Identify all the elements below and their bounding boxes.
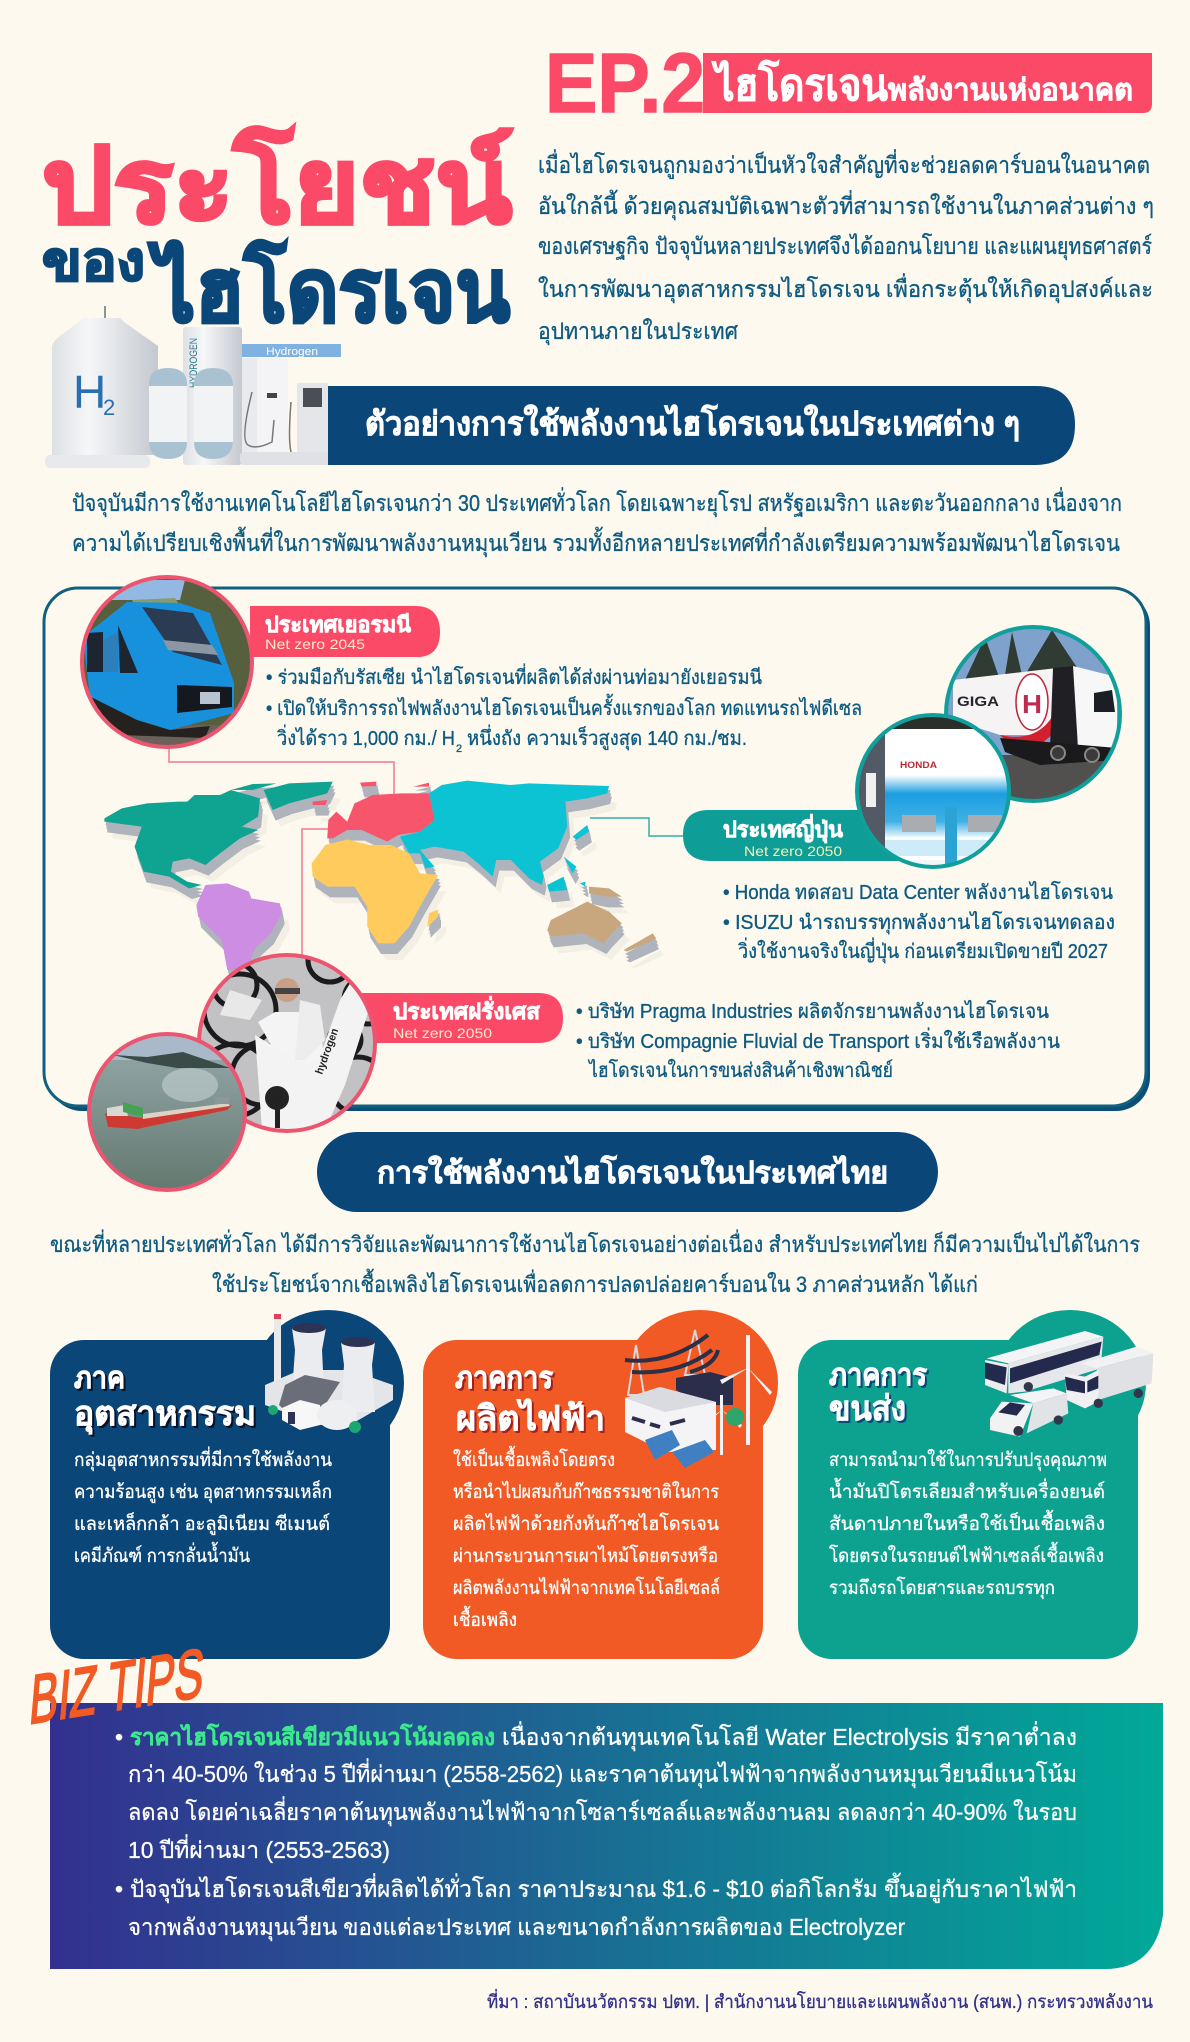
panel: transport: น้ำมันปิโตรเลียมสำหรับเครื่องยนต์ bbox=[829, 1478, 1105, 1503]
panel: industry: ภาค bbox=[74, 1362, 125, 1395]
heading: examples abroad: ตัวอย่างการใช้พลังงานไฮโดรเจนในประเทศต่าง ๆ bbox=[365, 404, 1020, 442]
text: tips body: ปัจจุบันไฮโดรเจนสีเขียวที่ผลิตได้ทั่วโลก ราคาประมาณ $1.6 - $10 ต่อกิโลกรัม ขึ้นอยู่กับราคาไฟฟ้า bbox=[130, 1873, 1077, 1903]
heading: thailand: การใช้พลังงานไฮโดรเจนในประเทศไทย bbox=[377, 1154, 888, 1190]
label: germany: ประเทศเยอรมนี bbox=[265, 612, 411, 637]
panel: industry: อุตสาหกรรม bbox=[74, 1395, 256, 1435]
label: germany bbox=[250, 606, 440, 657]
panel: power generation: ผ่านกระบวนการเผาไหม้โดยตรงหรือ bbox=[453, 1544, 718, 1567]
panel: power generation: ผลิตไฟฟ้า bbox=[456, 1398, 605, 1438]
text block: germany: • เปิดให้บริการรถไฟพลังงานไฮโดรเจนเป็นครั้งแรกของโลก ทดแทนรถไฟดีเซล bbox=[266, 694, 862, 720]
text: tips body: จากพลังงานหมุนเวียน ของแต่ละประเทศ และขนาดกำลังการผลิตของ Electrolyzer bbox=[128, 1914, 905, 1941]
episode banner: EP.2 bbox=[545, 36, 705, 130]
label: japan: ประเทศญี่ปุ่น bbox=[723, 813, 843, 844]
panel: power generation: ใช้เป็นเชื้อเพลิงโดยตรง bbox=[453, 1446, 615, 1471]
icon: hydrogen tanks and station: Hydrogen bbox=[266, 346, 318, 358]
japan: honda photo bbox=[855, 713, 1015, 873]
icon: hydrogen tanks and station bbox=[45, 306, 343, 468]
icon: bus truck van bbox=[985, 1331, 1153, 1437]
text block: germany: 2 bbox=[456, 743, 462, 755]
label: japan: Net zero 2050 bbox=[744, 843, 842, 859]
panel: transport bbox=[798, 1310, 1153, 1659]
label: france bbox=[360, 993, 563, 1043]
france: bicycle photo bbox=[197, 953, 377, 1133]
panel: transport: สามารถนำมาใช้ในการปรับปรุงคุณภาพ bbox=[829, 1449, 1107, 1472]
text: tips body: กว่า 40-50% ในช่วง 5 ปีที่ผ่านมา (2558-2562) และราคาต้นทุนไฟฟ้าจากพลังงานหมุนเวียนมีแนวโน้ม bbox=[128, 1758, 1077, 1788]
episode banner bbox=[545, 36, 1152, 130]
panel: transport: ภาคการ bbox=[829, 1359, 927, 1392]
title: ของ bbox=[42, 232, 145, 292]
intro paragraph bbox=[538, 149, 1154, 345]
panel: industry: และเหล็กกล้า อะลูมิเนียม ซีเมนต์ bbox=[74, 1511, 330, 1535]
heading: examples abroad bbox=[328, 386, 1075, 465]
panel: transport: ขนส่ง bbox=[829, 1390, 906, 1428]
biz tips badge: BIZ TIPS bbox=[27, 1633, 207, 1739]
japan: truck photo: GIGA bbox=[957, 693, 999, 709]
text block: japan: • Honda ทดสอบ Data Center พลังงานไฮโดรเจน bbox=[723, 881, 1113, 904]
text block: thailand overview bbox=[50, 1229, 1140, 1297]
germany: train photo bbox=[80, 575, 255, 750]
panel: power generation: หรือนำไปผสมกับก๊าซธรรมชาติในการ bbox=[453, 1481, 719, 1503]
text block: germany: วิ่งได้ราว 1,000 กม./ H bbox=[277, 724, 455, 750]
text: tips body: • bbox=[115, 1876, 123, 1902]
title: ไฮโดรเจน bbox=[148, 240, 510, 340]
panel: power generation: ผลิตไฟฟ้าด้วยกังหันก๊าซไฮโดรเจน bbox=[453, 1512, 719, 1535]
text block: japan: วิ่งใช้งานจริงในญี่ปุ่น ก่อนเตรียมเปิดขายปี 2027 bbox=[738, 937, 1108, 964]
intro paragraph: ในการพัฒนาอุตสาหกรรมไฮโดรเจน เพื่อกระตุ้นให้เกิดอุปสงค์และ bbox=[538, 273, 1153, 303]
text block: france: • บริษัท Compagnie Fluvial de Transport เริ่มใช้เรือพลังงาน bbox=[576, 1027, 1060, 1053]
text block: france bbox=[576, 1000, 1060, 1082]
panel: industry: กลุ่มอุตสาหกรรมที่มีการใช้พลังงาน bbox=[74, 1446, 332, 1472]
panel: countries map bbox=[44, 588, 1150, 1111]
heading: thailand bbox=[317, 1132, 938, 1212]
panel: power generation bbox=[423, 1310, 778, 1659]
title bbox=[42, 126, 512, 340]
label: germany: Net zero 2045 bbox=[265, 636, 365, 652]
japan: honda photo: HONDA bbox=[900, 760, 938, 770]
connectors bbox=[169, 745, 690, 960]
panel: power generation: เชื้อเพลิง bbox=[453, 1606, 517, 1631]
panel: industry: เคมีภัณฑ์ การกลั่นน้ำมัน bbox=[74, 1542, 250, 1567]
panel: power generation: ผลิตพลังงานไฟฟ้าจากเทคโนโลยีเซลล์ bbox=[453, 1576, 720, 1599]
text block: japan: • ISUZU นำรถบรรทุกพลังงานไฮโดรเจนทดลอง bbox=[723, 911, 1115, 935]
text: tips body: 10 ปีที่ผ่านมา (2553-2563) bbox=[128, 1834, 390, 1863]
icon: hydrogen tanks and station: HYDROGEN bbox=[188, 338, 200, 388]
text block: germany bbox=[266, 663, 862, 755]
panel: power generation: ภาคการ bbox=[455, 1362, 553, 1395]
text: tips body: ราคาไฮโดรเจนสีเขียวมีแนวโน้มลดลง bbox=[130, 1723, 495, 1750]
japan: truck photo: H bbox=[1022, 689, 1042, 719]
text block: thailand overview: ใช้ประโยชน์จากเชื้อเพลิงไฮโดรเจนเพื่อลดการปลดปล่อยคาร์บอนใน 3 ภาคส่วนหลัก ได้แก่ bbox=[212, 1269, 978, 1297]
text block: germany: • ร่วมมือกับรัสเซีย นำไฮโดรเจนที่ผลิตได้ส่งผ่านท่อมายังเยอรมนี bbox=[266, 663, 762, 689]
japan: truck photo bbox=[940, 625, 1130, 810]
text block: japan bbox=[723, 881, 1115, 964]
text block: france: • บริษัท Pragma Industries ผลิตจักรยานพลังงานไฮโดรเจน bbox=[576, 1000, 1049, 1023]
text: tips body: ลดลง โดยค่าเฉลี่ยราคาต้นทุนพลังงานไฟฟ้าจากโซลาร์เซลล์และพลังงานลม ลดลงกว่า 40-90% ในรอบ bbox=[128, 1796, 1077, 1826]
icon: hydrogen tanks and station: H bbox=[73, 366, 106, 418]
text: tips body bbox=[115, 1721, 1077, 1941]
panel: transport: รวมถึงรถโดยสารและรถบรรทุก bbox=[829, 1576, 1055, 1600]
icon: factory bbox=[265, 1314, 393, 1433]
intro paragraph: อุปทานภายในประเทศ bbox=[538, 318, 738, 345]
label: france: Net zero 2050 bbox=[393, 1025, 492, 1041]
icon: power plant and wind turbines bbox=[625, 1330, 772, 1468]
panel: industry: ความร้อนสูง เช่น อุตสาหกรรมเหล็ก bbox=[74, 1479, 332, 1504]
text block: france: ไฮโดรเจนในการขนส่งสินค้าเชิงพาณิชย์ bbox=[587, 1059, 893, 1082]
text: tips body: • bbox=[115, 1724, 123, 1750]
episode banner: พลังงานแห่งอนาคต bbox=[888, 74, 1133, 107]
text block: germany: หนึ่งถัง ความเร็วสูงสุด 140 กม./ชม. bbox=[467, 724, 747, 751]
panel: industry bbox=[50, 1310, 404, 1659]
panel: transport: สันดาปภายในหรือใช้เป็นเชื้อเพลิง bbox=[829, 1510, 1105, 1535]
panel: biz tips bbox=[50, 1703, 1163, 1969]
label: france: ประเทศฝรั่งเศส bbox=[393, 995, 541, 1024]
text block: global overview bbox=[72, 487, 1122, 557]
intro paragraph: อันใกล้นี้ ด้วยคุณสมบัติเฉพาะตัวที่สามารถใช้งานในภาคส่วนต่าง ๆ bbox=[538, 190, 1154, 220]
world map bbox=[104, 781, 664, 987]
france: bicycle photo: hydrogen bbox=[314, 1027, 341, 1076]
panel: transport: โดยตรงในรถยนต์ไฟฟ้าเซลล์เชื้อเพลิง bbox=[829, 1542, 1104, 1567]
france: barge photo bbox=[85, 1030, 250, 1195]
title: ประโยชน์ bbox=[42, 126, 512, 245]
text: tips body: เนื่องจากต้นทุนเทคโนโลยี Water Electrolysis มีราคาต่ำลง bbox=[502, 1721, 1077, 1751]
icon: hydrogen tanks and station: 2 bbox=[103, 395, 115, 420]
episode banner: ไฮโดรเจน bbox=[711, 58, 888, 110]
label: japan bbox=[683, 810, 905, 861]
